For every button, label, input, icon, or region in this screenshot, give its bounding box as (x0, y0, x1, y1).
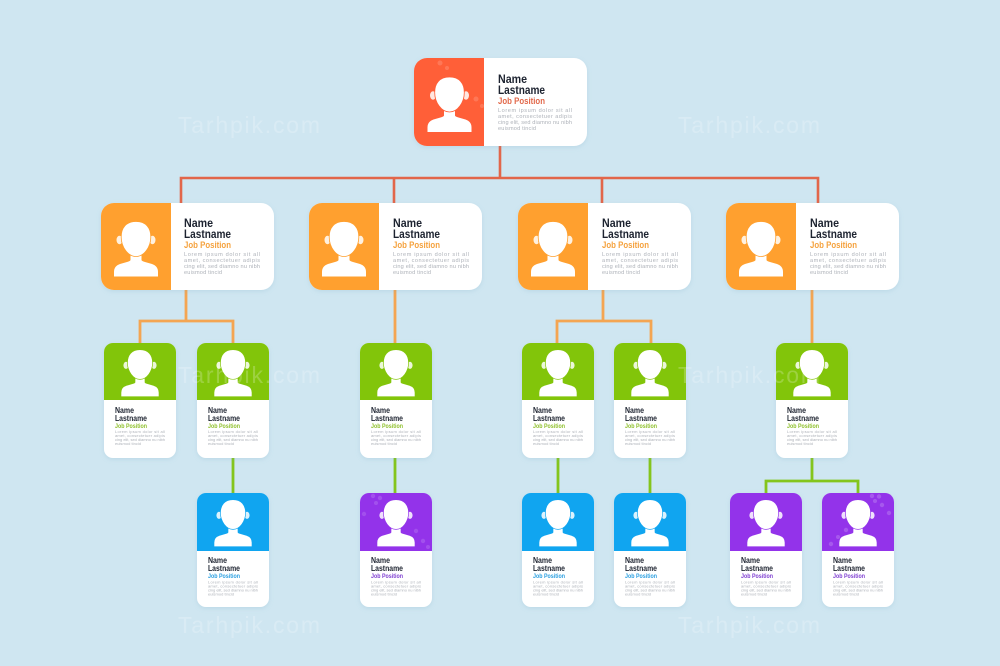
card: staff 6: euismod tincid (833, 592, 859, 596)
card: team lead 4: Name (533, 405, 552, 415)
card: team lead 1 (104, 343, 176, 458)
watermarks: Tarhpik.com (178, 362, 320, 388)
card: team lead 4: Lastname (533, 413, 565, 423)
card: manager 3: Lorem ipsum dolor sit all (602, 252, 678, 258)
card: staff 2: Name (371, 555, 390, 565)
card: staff 3: Name (533, 555, 552, 565)
card: team lead 6: Lorem ipsum dolor sit all (787, 429, 837, 434)
card: staff 4: Name (625, 555, 644, 565)
card: team lead 5: Lastname (625, 413, 657, 423)
card: staff 6: Lorem ipsum dolor sit all (833, 580, 883, 584)
card: manager 4: amet, consectetuer adipis (810, 258, 886, 264)
card: team lead 1: euismod tincid (115, 441, 141, 446)
card: staff 2: Lorem ipsum dolor sit all (371, 580, 421, 584)
card: top executive: amet, consectetuer adipis (498, 114, 572, 120)
card: team lead 3: amet, consectetuer adipis (371, 433, 421, 438)
card: top executive: cing elit, sed diamno nu nibh (498, 120, 572, 126)
card: manager 4: Job Position (810, 240, 857, 250)
card: manager 2: Lastname (393, 227, 440, 241)
card: staff 1: euismod tincid (208, 592, 234, 596)
card: staff 2: Job Position (371, 574, 403, 580)
card: staff 1: amet, consectetuer adipis (208, 584, 258, 588)
card: staff 6: amet, consectetuer adipis (833, 584, 883, 588)
card: staff 5: Job Position (741, 574, 773, 580)
card: manager 4: euismod tincid (810, 270, 848, 276)
card: team lead 3: Lorem ipsum dolor sit all (371, 429, 421, 434)
card: manager 4 (726, 203, 899, 290)
card: staff 3: Lorem ipsum dolor sit all (533, 580, 583, 584)
card: team lead 2: Job Position (208, 424, 240, 430)
card: team lead 6: Job Position (787, 424, 819, 430)
card: manager 1: cing elit, sed diamno nu nibh (184, 264, 260, 270)
card: top executive (414, 58, 587, 146)
card: team lead 6: euismod tincid (787, 441, 813, 446)
card: staff 6: Name (833, 555, 852, 565)
card: staff 3: Lastname (533, 563, 565, 573)
card: manager 1: Lastname (184, 227, 231, 241)
card: manager 3: cing elit, sed diamno nu nibh (602, 264, 678, 270)
connectors: top level to managers (181, 146, 818, 203)
card: staff 2: cing elit, sed diamno nu nibh (371, 588, 421, 592)
card: team lead 5: euismod tincid (625, 441, 651, 446)
card: team lead 2: Name (208, 405, 227, 415)
card: staff 4: amet, consectetuer adipis (625, 584, 675, 588)
card: team lead 5 (614, 343, 686, 458)
connectors: managers to team leads (140, 290, 812, 343)
card: manager 2: amet, consectetuer adipis (393, 258, 469, 264)
card: staff 5: amet, consectetuer adipis (741, 584, 791, 588)
card: manager 3: Job Position (602, 240, 649, 250)
card: team lead 2: euismod tincid (208, 441, 234, 446)
card: team lead 1: Lastname (115, 413, 147, 423)
card: staff 2: euismod tincid (371, 592, 397, 596)
card: team lead 2 (197, 343, 269, 458)
card: team lead 6: cing elit, sed diamno nu nibh (787, 437, 837, 442)
card: staff 5: Lastname (741, 563, 773, 573)
card: team lead 5: amet, consectetuer adipis (625, 433, 675, 438)
card: manager 4: Lastname (810, 227, 857, 241)
card: team lead 4: euismod tincid (533, 441, 559, 446)
card: team lead 1: Name (115, 405, 134, 415)
watermarks: Tarhpik.com (678, 112, 820, 138)
card: staff 3: amet, consectetuer adipis (533, 584, 583, 588)
card: team lead 2: Lastname (208, 413, 240, 423)
card: manager 1: amet, consectetuer adipis (184, 258, 260, 264)
card: manager 1: euismod tincid (184, 270, 222, 276)
card: staff 4: cing elit, sed diamno nu nibh (625, 588, 675, 592)
card: team lead 4 (522, 343, 594, 458)
card: staff 3: cing elit, sed diamno nu nibh (533, 588, 583, 592)
card: team lead 6: Lastname (787, 413, 819, 423)
watermarks: Tarhpik.com (678, 362, 820, 388)
card: team lead 1: Job Position (115, 424, 147, 430)
card: team lead 5: Name (625, 405, 644, 415)
card: manager 2: Job Position (393, 240, 440, 250)
card: staff 6: Lastname (833, 563, 865, 573)
card: staff 1 (197, 493, 269, 607)
card: team lead 2: cing elit, sed diamno nu nibh (208, 437, 258, 442)
card: manager 1 (101, 203, 274, 290)
card: manager 2: cing elit, sed diamno nu nibh (393, 264, 469, 270)
card: staff 6: Job Position (833, 574, 865, 580)
card: staff 1: Name (208, 555, 227, 565)
card: team lead 2: Lorem ipsum dolor sit all (208, 429, 258, 434)
card: manager 4: Name (810, 216, 839, 230)
card: team lead 5: cing elit, sed diamno nu nibh (625, 437, 675, 442)
card: top executive: Lastname (498, 83, 545, 97)
watermarks: Tarhpik.com (178, 612, 320, 638)
card: staff 6 (822, 493, 894, 607)
card: manager 2 (309, 203, 482, 290)
card: team lead 4: cing elit, sed diamno nu nibh (533, 437, 583, 442)
card: team lead 3 (360, 343, 432, 458)
card: team lead 3: Lastname (371, 413, 403, 423)
card: team lead 5: Job Position (625, 424, 657, 430)
card: staff 5: cing elit, sed diamno nu nibh (741, 588, 791, 592)
card: manager 2: Name (393, 216, 422, 230)
card: staff 6: cing elit, sed diamno nu nibh (833, 588, 883, 592)
watermarks (178, 112, 820, 638)
card: staff 5: Lorem ipsum dolor sit all (741, 580, 791, 584)
card: staff 4: Lastname (625, 563, 657, 573)
card: top executive: Lorem ipsum dolor sit all (498, 108, 572, 114)
card: manager 3: euismod tincid (602, 270, 640, 276)
card: staff 3 (522, 493, 594, 607)
card: team lead 4: Job Position (533, 424, 565, 430)
card: staff 1: Job Position (208, 574, 240, 580)
card: top executive: Job Position (498, 96, 545, 106)
card: team lead 6: Name (787, 405, 806, 415)
card: staff 5: euismod tincid (741, 592, 767, 596)
card: manager 4: cing elit, sed diamno nu nibh (810, 264, 886, 270)
card: team lead 3: Name (371, 405, 390, 415)
card: team lead 3: Job Position (371, 424, 403, 430)
card: team lead 4: Lorem ipsum dolor sit all (533, 429, 583, 434)
card: staff 4: euismod tincid (625, 592, 651, 596)
card: staff 4: Lorem ipsum dolor sit all (625, 580, 675, 584)
card: staff 1: cing elit, sed diamno nu nibh (208, 588, 258, 592)
card: staff 2: Lastname (371, 563, 403, 573)
card: team lead 2: amet, consectetuer adipis (208, 433, 258, 438)
card: staff 4: Job Position (625, 574, 657, 580)
card: staff 2: amet, consectetuer adipis (371, 584, 421, 588)
card: manager 2: Lorem ipsum dolor sit all (393, 252, 469, 258)
card: manager 3: Lastname (602, 227, 649, 241)
card: team lead 4: amet, consectetuer adipis (533, 433, 583, 438)
card: team lead 1: amet, consectetuer adipis (115, 433, 165, 438)
card: team lead 1: Lorem ipsum dolor sit all (115, 429, 165, 434)
watermarks: Tarhpik.com (178, 112, 320, 138)
card: top executive: euismod tincid (498, 126, 536, 132)
card: team lead 3: euismod tincid (371, 441, 397, 446)
connectors: team leads to staff (233, 458, 858, 493)
card: manager 3: Name (602, 216, 631, 230)
card: manager 1: Name (184, 216, 213, 230)
card: team lead 6 (776, 343, 848, 458)
card: staff 5: Name (741, 555, 760, 565)
card: staff 1: Lorem ipsum dolor sit all (208, 580, 258, 584)
card: team lead 6: amet, consectetuer adipis (787, 433, 837, 438)
card: team lead 3: cing elit, sed diamno nu nibh (371, 437, 421, 442)
card: team lead 1: cing elit, sed diamno nu nibh (115, 437, 165, 442)
card: manager 1: Lorem ipsum dolor sit all (184, 252, 260, 258)
card: staff 2 (360, 493, 432, 607)
card: manager 4: Lorem ipsum dolor sit all (810, 252, 886, 258)
card: staff 4 (614, 493, 686, 607)
card: top executive: Name (498, 72, 527, 86)
card: staff 3: Job Position (533, 574, 565, 580)
card: staff 1: Lastname (208, 563, 240, 573)
card: manager 3 (518, 203, 691, 290)
card: staff 3: euismod tincid (533, 592, 559, 596)
card: manager 2: euismod tincid (393, 270, 431, 276)
card: staff 5 (730, 493, 802, 607)
card: manager 1: Job Position (184, 240, 231, 250)
watermarks: Tarhpik.com (678, 612, 820, 638)
card: team lead 5: Lorem ipsum dolor sit all (625, 429, 675, 434)
card: manager 3: amet, consectetuer adipis (602, 258, 678, 264)
